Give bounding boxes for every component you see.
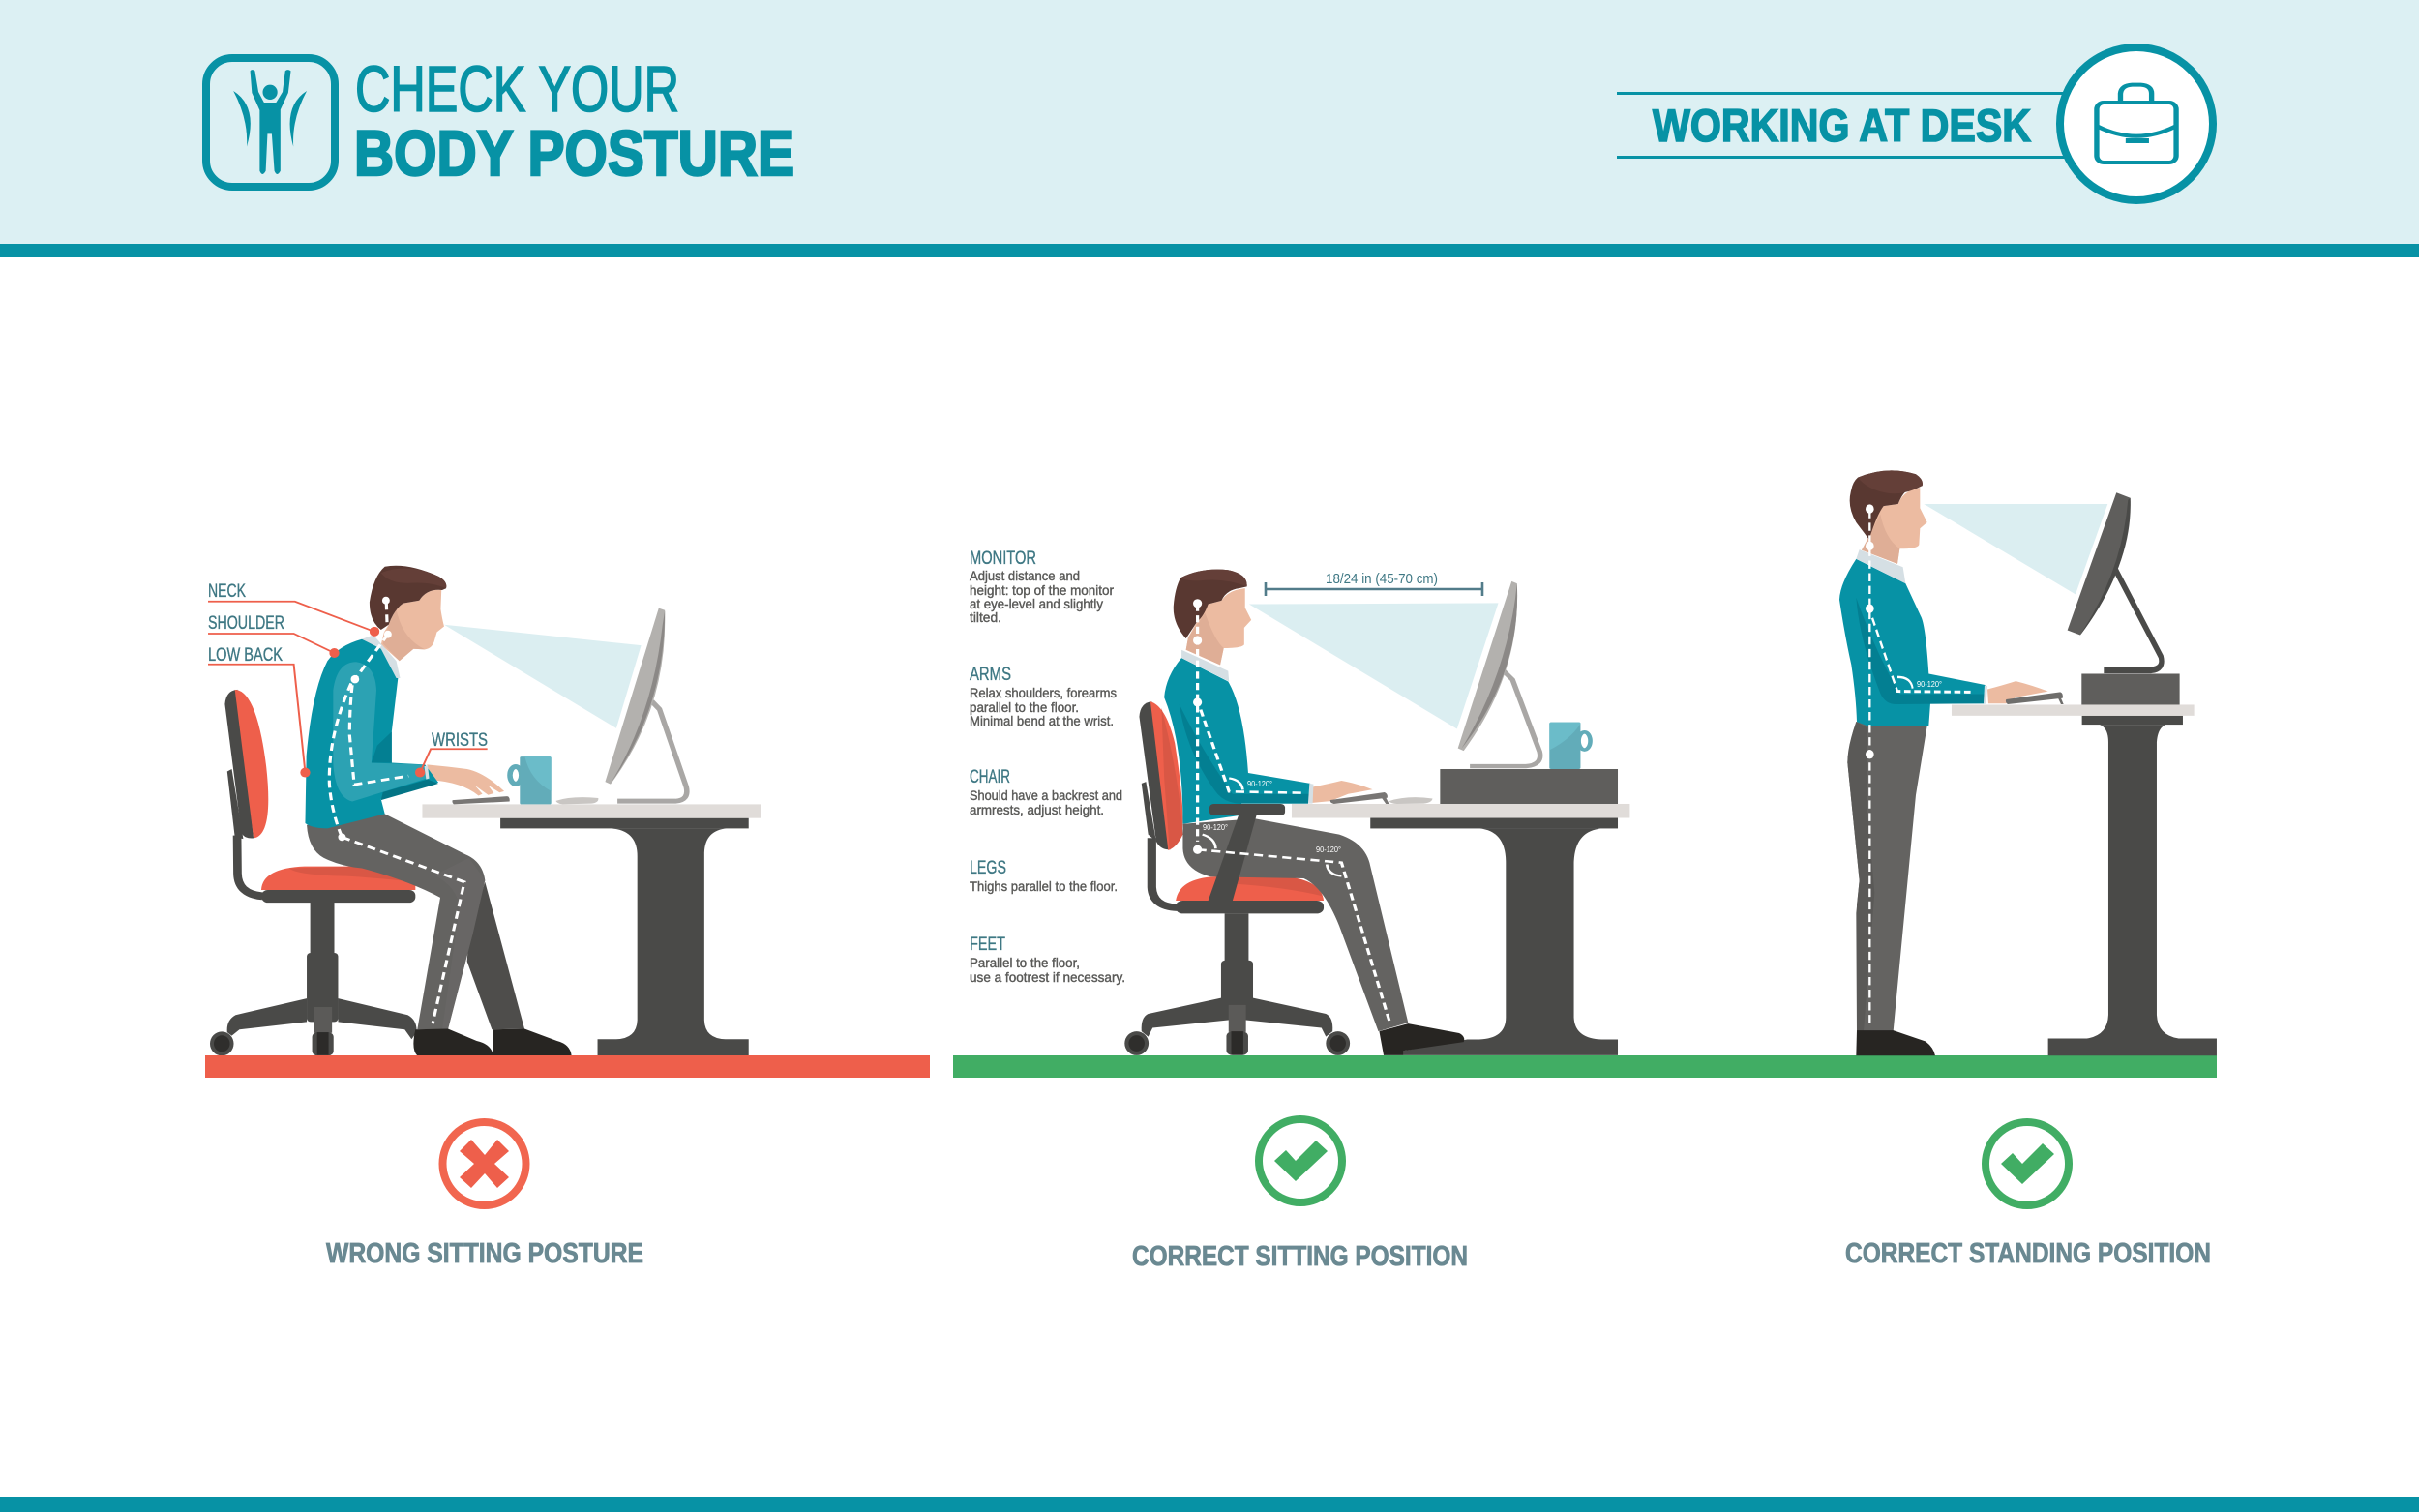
- tip: monitor: [970, 548, 1114, 625]
- posture guide lines: [329, 602, 464, 1023]
- caption: wrong: WRONG SITTING POSTURE: [326, 1238, 643, 1269]
- tip: monitor: at eye-level and slightly: [970, 596, 1103, 611]
- guide joints: [338, 597, 392, 841]
- tip: arms: [970, 665, 1117, 728]
- tip: feet: Parallel to the floor,: [970, 955, 1080, 970]
- mug: [1549, 723, 1591, 769]
- tip: chair: CHAIR: [970, 767, 1010, 787]
- tip: monitor: MONITOR: [970, 548, 1036, 569]
- standing desk: [1952, 673, 2217, 1055]
- tip: legs: LEGS: [970, 858, 1006, 878]
- mouse: [1389, 797, 1433, 804]
- body part labels: NECK: [208, 581, 246, 602]
- tip: legs: [970, 858, 1118, 894]
- body part labels: WRISTS: [432, 730, 488, 751]
- header band: [0, 0, 2419, 257]
- tip: arms: Relax shoulders, forearms: [970, 685, 1117, 700]
- panel: wrong sitting posture illustration: [208, 566, 761, 1055]
- angle arc: [1897, 677, 1913, 689]
- icon: body posture logo: [206, 58, 335, 187]
- angle labels: 90-120°: [1247, 780, 1272, 788]
- tip: monitor: tilted.: [970, 609, 1001, 625]
- distance measure: 18/24 in (45-70 cm): [1326, 571, 1438, 587]
- person: [1839, 470, 2048, 1055]
- keyboard: [2006, 692, 2064, 704]
- chair: [1124, 701, 1350, 1055]
- keyboard: [1330, 792, 1389, 804]
- tip: feet: FEET: [970, 934, 1005, 955]
- icon: wrong cross: [443, 1122, 526, 1205]
- guide joints: [1193, 599, 1202, 854]
- tip: arms: parallel to the floor.: [970, 699, 1079, 715]
- angle arcs: [1203, 778, 1341, 876]
- body part labels: [208, 581, 488, 751]
- guide joints: [1866, 504, 1874, 758]
- desk: [1292, 769, 1629, 1055]
- heading: working at desk: WORKING AT DESK: [1653, 100, 2031, 151]
- posture guide lines: [1869, 510, 1974, 1023]
- floor: correct: [953, 1055, 2217, 1078]
- panel: correct standing illustration: [1839, 470, 2217, 1055]
- tip: chair: armrests, adjust height.: [970, 802, 1104, 817]
- person: [1164, 570, 1464, 1055]
- tip: monitor: Adjust distance and: [970, 568, 1080, 583]
- tip: arms: ARMS: [970, 665, 1011, 685]
- icon: correct sitting check: [1259, 1119, 1342, 1202]
- title: [354, 53, 794, 189]
- body part labels: SHOULDER: [208, 613, 284, 634]
- chair: [210, 690, 417, 1055]
- angle labels: [1203, 780, 1341, 854]
- distance measure: [1266, 571, 1482, 596]
- tip: chair: Should have a backrest and: [970, 787, 1122, 803]
- mug: [510, 756, 552, 804]
- angle labels: 90-120°: [1203, 823, 1228, 832]
- monitor and sight cone: [444, 608, 687, 801]
- icon: correct standing check: [1986, 1122, 2069, 1205]
- panel: tips text column: [970, 548, 1125, 985]
- monitor and sight cone: [1249, 581, 1540, 766]
- caption: correct standing: CORRECT STANDING POSITION: [1845, 1238, 2211, 1269]
- floor: wrong: [205, 1055, 930, 1078]
- body part labels: LOW BACK: [208, 645, 283, 666]
- heading: working at desk: [1617, 92, 2072, 159]
- caption: correct sitting: CORRECT SITTING POSITION: [1132, 1241, 1468, 1272]
- tip: chair: [970, 767, 1122, 817]
- panel: correct sitting illustration: [1124, 570, 1629, 1055]
- monitor and sight cone: [1924, 492, 2162, 670]
- keyboard and mouse: [452, 796, 598, 804]
- tip: legs: Thighs parallel to the floor.: [970, 878, 1118, 894]
- title: BODY POSTURE: [354, 117, 794, 189]
- callout dots: [300, 627, 425, 778]
- angle label: 90-120°: [1917, 680, 1942, 689]
- tip: feet: use a footrest if necessary.: [970, 969, 1125, 985]
- tip: monitor: height: top of the monitor: [970, 582, 1114, 598]
- tip: arms: Minimal bend at the wrist.: [970, 713, 1114, 728]
- desk: [422, 804, 761, 1055]
- icon: briefcase: [2060, 47, 2213, 200]
- posture guide lines: [1198, 605, 1390, 1024]
- title: CHECK YOUR: [355, 53, 679, 126]
- angle labels: 90-120°: [1316, 845, 1341, 854]
- person: [305, 566, 572, 1055]
- footer bar: [0, 1497, 2419, 1512]
- tip: feet: [970, 934, 1125, 985]
- callout lines: [208, 602, 488, 773]
